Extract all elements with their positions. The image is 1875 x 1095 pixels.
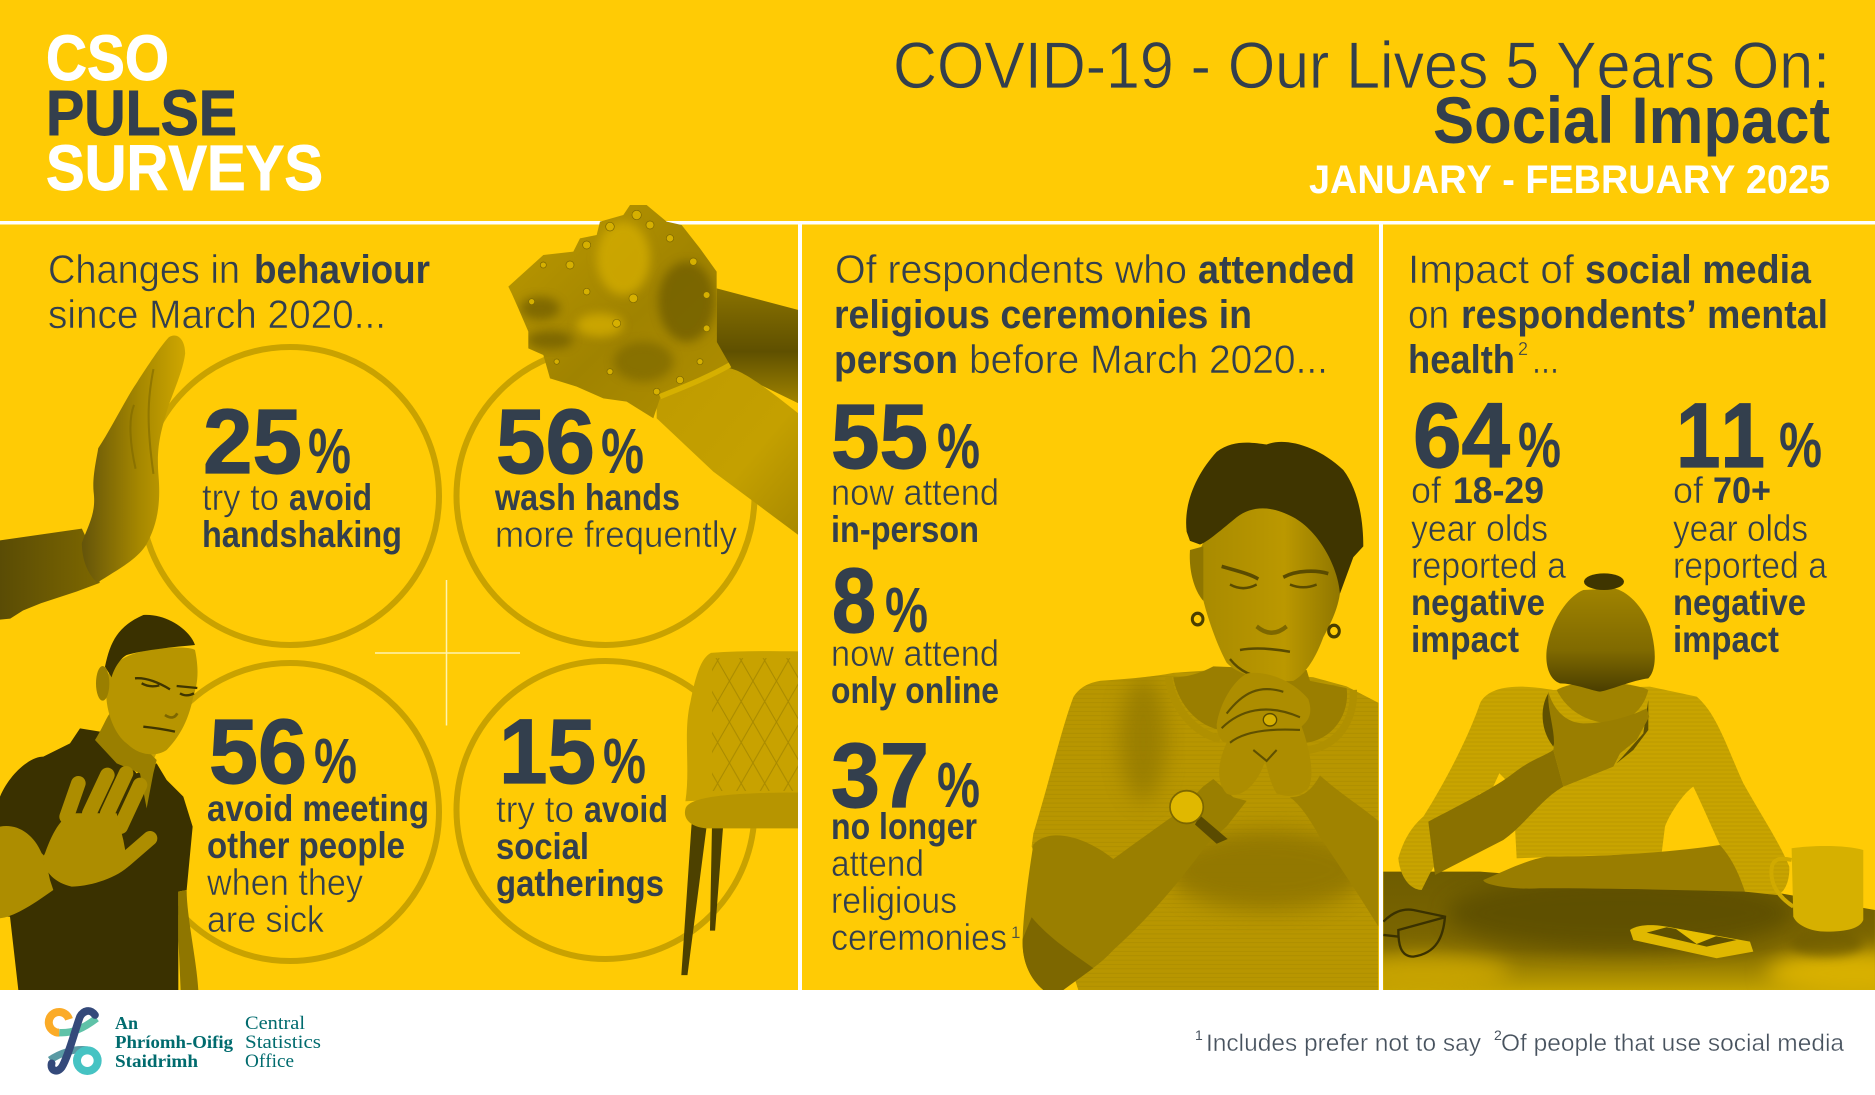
stat: attend online: now attend bbox=[831, 633, 999, 674]
facial features bbox=[135, 678, 197, 732]
stat: social gatherings bbox=[496, 701, 668, 904]
stat: meeting other people: % bbox=[314, 725, 357, 797]
sweater bbox=[1032, 670, 1378, 990]
stat: 70+ year olds: 70+ bbox=[1713, 470, 1771, 511]
open hand bbox=[43, 773, 150, 887]
stat: meeting other people: 56 bbox=[209, 701, 307, 803]
English name: Central bbox=[245, 1013, 305, 1034]
Irish name: Phríomh-Oifig bbox=[115, 1032, 233, 1052]
stat: attend in person: % bbox=[937, 410, 980, 482]
photo: soapy hands bbox=[508, 205, 798, 535]
ear bbox=[96, 666, 109, 701]
forearm bbox=[1428, 750, 1563, 875]
footnotes bbox=[1195, 1027, 1845, 1057]
heading: social media: ... bbox=[1532, 338, 1559, 382]
table shading bbox=[1337, 877, 1875, 997]
seat bbox=[685, 793, 800, 828]
stat: 18-29 year olds bbox=[1411, 385, 1566, 660]
neck bbox=[1173, 666, 1347, 743]
stat: no longer attend: attend bbox=[831, 843, 924, 884]
photo: chair bbox=[681, 651, 800, 975]
stat: handshaking: try to bbox=[202, 477, 279, 518]
stat: 70+ year olds: 11 bbox=[1676, 385, 1765, 487]
stat: no longer attend: 37 bbox=[831, 725, 929, 827]
photo: woman at table bbox=[1337, 573, 1875, 997]
stat: meeting other people: avoid meeting bbox=[207, 788, 429, 829]
coffee mug bbox=[1771, 859, 1793, 907]
stat: social gatherings: 15 bbox=[499, 701, 596, 803]
stat: attend in person: 55 bbox=[831, 386, 928, 488]
centre cross bbox=[375, 580, 520, 726]
polo shirt bbox=[0, 728, 193, 990]
stat: attend online: 8 bbox=[832, 550, 876, 652]
stat: no longer attend: religious bbox=[831, 880, 957, 921]
stat: 18-29 year olds: year olds bbox=[1411, 508, 1548, 549]
stat: meeting other people bbox=[206, 701, 429, 940]
circle: meeting sick people bbox=[141, 663, 439, 961]
stat: handshaking bbox=[202, 391, 402, 555]
neck shadow bbox=[1543, 693, 1648, 763]
stat: no longer attend bbox=[831, 725, 1020, 958]
stat: wash hands: wash hands bbox=[494, 477, 680, 518]
heading: religious ceremonies: before March 2020... bbox=[969, 338, 1328, 382]
survey brand heading bbox=[46, 22, 323, 204]
hair bbox=[1546, 588, 1655, 692]
stat: 70+ year olds: reported a bbox=[1673, 545, 1827, 586]
chair back bbox=[685, 651, 800, 801]
heading: social media: health bbox=[1408, 338, 1515, 382]
facial features bbox=[1222, 566, 1328, 579]
stat: attend online: only online bbox=[831, 670, 999, 711]
neckline ribbing bbox=[1168, 677, 1353, 750]
stat: handshaking: avoid bbox=[289, 477, 372, 518]
photo: man gesturing stop bbox=[0, 615, 198, 990]
heading: religious ceremonies: attended bbox=[1198, 248, 1355, 292]
stat: no longer attend: 1 bbox=[1011, 923, 1020, 942]
English name bbox=[245, 1013, 321, 1072]
hair bbox=[105, 615, 195, 677]
heading: social media: 2 bbox=[1518, 339, 1528, 359]
stat: 70+ year olds: year olds bbox=[1673, 508, 1808, 549]
heading: social media: Impact of bbox=[1408, 248, 1575, 292]
title: Social Impact bbox=[1433, 83, 1830, 157]
footnotes: Includes prefer not to say bbox=[1206, 1030, 1481, 1057]
stat: wash hands bbox=[494, 391, 737, 555]
face bbox=[1200, 508, 1341, 681]
stat: attend online: % bbox=[885, 574, 928, 646]
heading: religious ceremonies: Of respondents who bbox=[835, 248, 1187, 292]
heading: religious ceremonies bbox=[834, 248, 1355, 382]
glasses bbox=[1383, 910, 1445, 957]
stat: 70+ year olds: % bbox=[1779, 409, 1822, 481]
sweater shadows bbox=[1032, 670, 1378, 990]
title: JANUARY - FEBRUARY 2025 bbox=[1309, 158, 1830, 202]
quilting bbox=[712, 658, 800, 791]
heading: behaviour: Changes in bbox=[48, 248, 240, 292]
stat: handshaking: % bbox=[308, 415, 351, 487]
circle: handshaking bbox=[141, 347, 439, 645]
stat: social gatherings: social bbox=[496, 826, 589, 867]
watch strap bbox=[1195, 815, 1228, 844]
stat: no longer attend: no longer bbox=[831, 806, 977, 847]
resting forearm bbox=[1483, 845, 1745, 892]
survey brand heading: SURVEYS bbox=[46, 132, 323, 204]
photo: woman praying bbox=[1023, 442, 1378, 990]
stat: social gatherings: % bbox=[603, 725, 646, 797]
chair legs bbox=[681, 824, 723, 975]
stat: attend in person: in-person bbox=[831, 509, 979, 550]
clasped hands bbox=[1217, 673, 1311, 796]
panel: social media bbox=[1337, 573, 1875, 997]
stat: handshaking: 25 bbox=[203, 391, 302, 493]
footnotes: 2 bbox=[1494, 1027, 1502, 1043]
forearm bbox=[0, 826, 53, 918]
stat: 70+ year olds: impact bbox=[1673, 619, 1779, 660]
light and dark modelling bbox=[520, 222, 715, 382]
Irish name: Staidrimh bbox=[115, 1051, 198, 1071]
stat: attend online bbox=[831, 550, 999, 711]
heading: behaviour: since March 2020... bbox=[48, 293, 386, 337]
left arm bbox=[1023, 779, 1247, 990]
smartphone bbox=[1630, 925, 1753, 958]
heading: social media: social media bbox=[1585, 248, 1812, 292]
neck bbox=[95, 713, 157, 808]
stat: attend in person: now attend bbox=[831, 472, 999, 513]
heading: social media: respondents’ mental bbox=[1461, 293, 1828, 337]
icon: knot mark bbox=[49, 1011, 98, 1071]
stat: 70+ year olds: negative bbox=[1673, 582, 1806, 623]
stat: 18-29 year olds: of bbox=[1411, 470, 1442, 511]
stat: meeting other people: are sick bbox=[207, 899, 324, 940]
panel dividers bbox=[0, 221, 1875, 990]
stat: wash hands: more frequently bbox=[495, 514, 737, 555]
forehead bbox=[1557, 682, 1648, 723]
stat: meeting other people: other people bbox=[207, 825, 405, 866]
forearm bbox=[657, 368, 798, 535]
hand over face bbox=[1548, 692, 1649, 787]
footer band bbox=[0, 990, 1875, 1095]
logo: CSO bbox=[49, 1011, 321, 1072]
stat: 18-29 year olds: % bbox=[1518, 409, 1561, 481]
left ear bbox=[1190, 546, 1203, 601]
stat: attend in person bbox=[831, 386, 999, 550]
right arm bbox=[1290, 775, 1378, 926]
survey brand heading: PULSE bbox=[46, 77, 237, 149]
upper arm bbox=[717, 288, 798, 403]
title bbox=[893, 28, 1830, 202]
footnotes: Of people that use social media bbox=[1501, 1030, 1845, 1057]
Irish name bbox=[115, 1013, 233, 1071]
stat: social gatherings: avoid bbox=[584, 789, 668, 830]
stat: no longer attend: ceremonies bbox=[831, 917, 1007, 958]
stat: wash hands: % bbox=[601, 415, 644, 487]
upper arm bbox=[178, 890, 198, 990]
hair bun bbox=[1584, 573, 1624, 590]
heading: religious ceremonies: person bbox=[834, 338, 958, 382]
stat: social gatherings: try to bbox=[496, 789, 574, 830]
panel: behaviour bbox=[0, 205, 800, 990]
circle: wash hands bbox=[456, 347, 754, 645]
panel: religious ceremonies bbox=[1023, 442, 1378, 990]
table bbox=[1383, 872, 1875, 990]
circle: social gatherings bbox=[456, 661, 754, 959]
soap foam bbox=[660, 365, 730, 397]
stat: handshaking: handshaking bbox=[202, 514, 402, 555]
stat: social gatherings: gatherings bbox=[496, 863, 664, 904]
heading: social media: on bbox=[1408, 293, 1449, 337]
stat: 18-29 year olds: impact bbox=[1411, 619, 1519, 660]
stat: meeting other people: when they bbox=[206, 862, 363, 903]
heading: religious ceremonies: religious ceremonies in bbox=[834, 293, 1252, 337]
stat: 18-29 year olds: 18-29 bbox=[1453, 470, 1544, 511]
face bbox=[106, 647, 198, 754]
stat: 18-29 year olds: 64 bbox=[1413, 385, 1510, 487]
survey brand heading: CSO bbox=[46, 22, 169, 94]
arm shadow bbox=[1023, 917, 1093, 990]
watch face bbox=[1170, 791, 1203, 823]
hands bbox=[508, 205, 730, 418]
heading: behaviour bbox=[48, 248, 430, 337]
sweater bbox=[1398, 687, 1789, 895]
gap between arm and body bbox=[1492, 773, 1506, 790]
English name: Statistics bbox=[245, 1032, 321, 1053]
stat: 18-29 year olds: reported a bbox=[1411, 545, 1566, 586]
stat: 70+ year olds: of bbox=[1673, 470, 1704, 511]
Irish name: An bbox=[115, 1013, 138, 1033]
photo: raised hand bbox=[0, 336, 185, 620]
footnotes: 1 bbox=[1195, 1027, 1203, 1043]
stat: 70+ year olds bbox=[1673, 385, 1827, 660]
ring bbox=[1263, 714, 1277, 726]
stat: 18-29 year olds: negative bbox=[1411, 582, 1545, 623]
stat: wash hands: 56 bbox=[496, 391, 595, 493]
heading: social media bbox=[1408, 248, 1828, 382]
stat: no longer attend: % bbox=[937, 749, 980, 821]
heading: behaviour: behaviour bbox=[254, 248, 430, 292]
hair bbox=[1186, 442, 1363, 594]
English name: Office bbox=[245, 1051, 294, 1072]
earrings bbox=[1192, 613, 1339, 637]
